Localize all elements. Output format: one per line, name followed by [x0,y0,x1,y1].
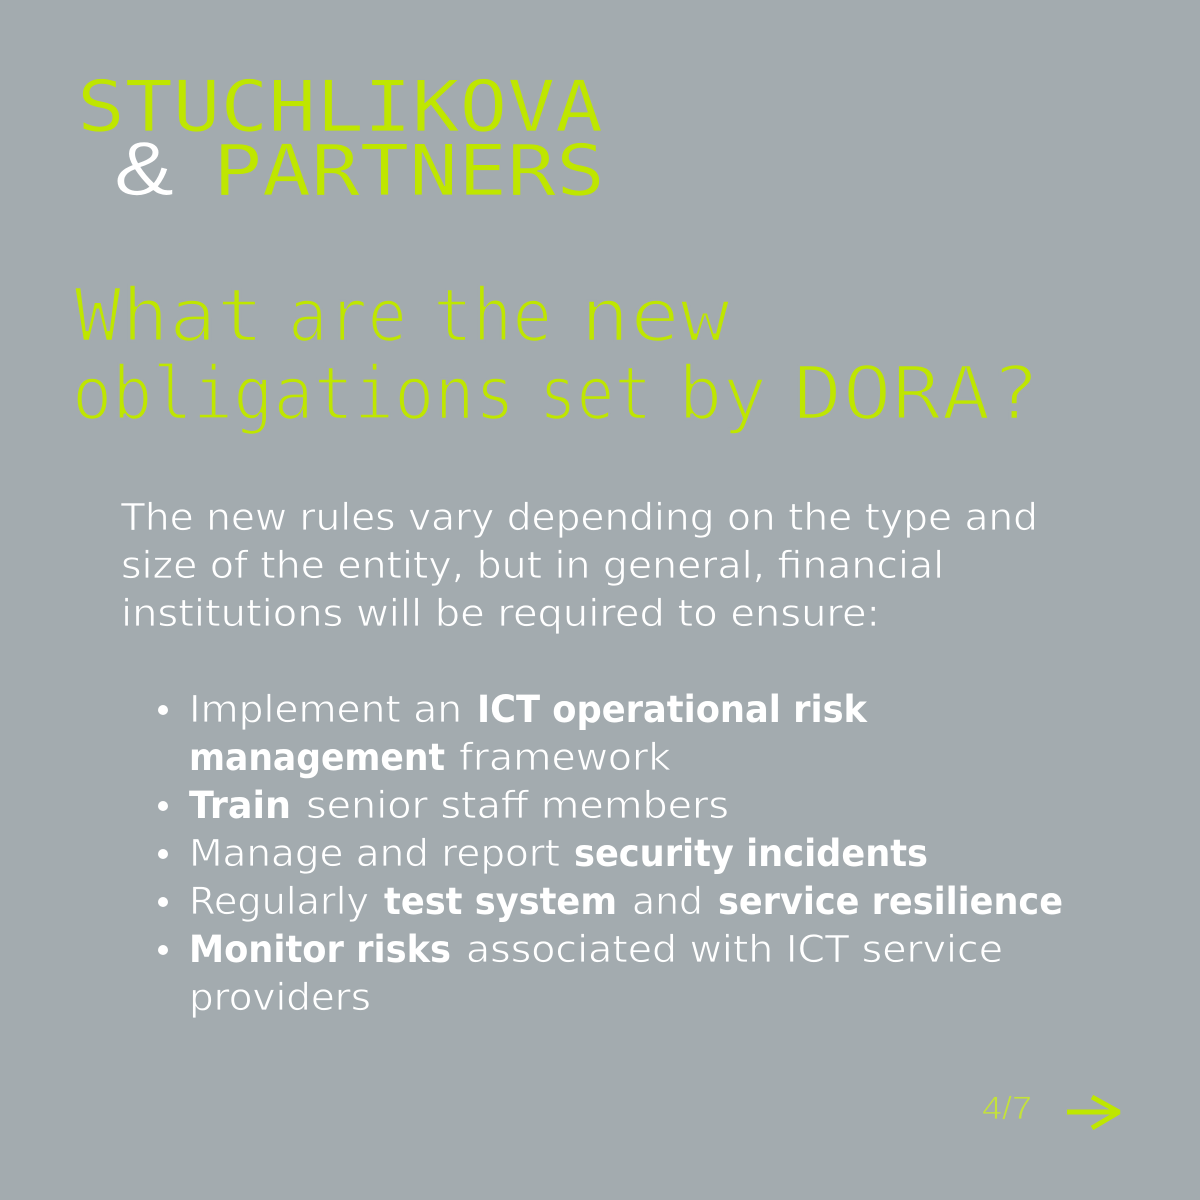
bullet 3: security incidents: security incidents [574,832,928,875]
bullet 1: ICT framework: Implement an [189,688,462,731]
bullet list [158,688,1063,1019]
heading line 2: by [678,351,767,437]
heading line 1: What [74,273,264,359]
bullet 4: resilience testing [158,880,1063,923]
heading line 2: set [539,351,652,437]
bullet 3: security incidents: Manage and report [189,832,560,875]
bullet 5: monitor risks: Monitor risks [189,928,451,971]
logo line: PARTNERS: PARTNERS [213,130,605,212]
heading line 1: are [288,273,407,359]
bullet 5: monitor risks: associated with ICT service [466,928,1003,971]
heading line 2 [72,351,1040,437]
bullet 5: monitor risks: providers [189,976,371,1019]
heading [72,273,1040,437]
heading line 1: new [580,273,731,359]
bullet 4: resilience testing: and [632,880,703,923]
logo ampersand: & [114,127,174,212]
intro paragraph [120,496,1038,635]
bullet 5: monitor risks [158,928,1003,1019]
heading line 1: the [433,273,552,359]
logo line: STUCHLIKOVA: STUCHLIKOVA [77,66,603,148]
bullet 2: train staff [158,784,729,827]
intro paragraph: The new rules vary depending on the type and [120,496,1038,539]
bullet 2: train staff: Train [189,784,291,827]
icon: next arrow [1067,1097,1119,1128]
intro paragraph: institutions will be required to ensure: [121,592,880,635]
bullet 1: ICT framework: framework [459,736,672,779]
bullet 4: resilience testing: Regularly [189,880,369,923]
heading line 2: DORA? [793,351,1040,437]
logo: Stuchlikova & Partners [77,66,605,212]
heading line 2: obligations [72,351,515,437]
bullet 4: resilience testing: service resilience [718,880,1063,923]
page number: 4/7 [982,1090,1032,1126]
intro paragraph: size of the entity, but in general, financial [121,544,944,587]
bullet 4: resilience testing: test system [384,880,617,923]
bullet 1: ICT framework: management [189,736,445,779]
bullet 1: ICT framework: ICT operational risk [477,688,868,731]
bullet 1: ICT framework [158,688,868,779]
bullet 3: security incidents [158,832,928,875]
heading line 1 [74,273,731,359]
bullet 2: train staff: senior staff members [306,784,729,827]
